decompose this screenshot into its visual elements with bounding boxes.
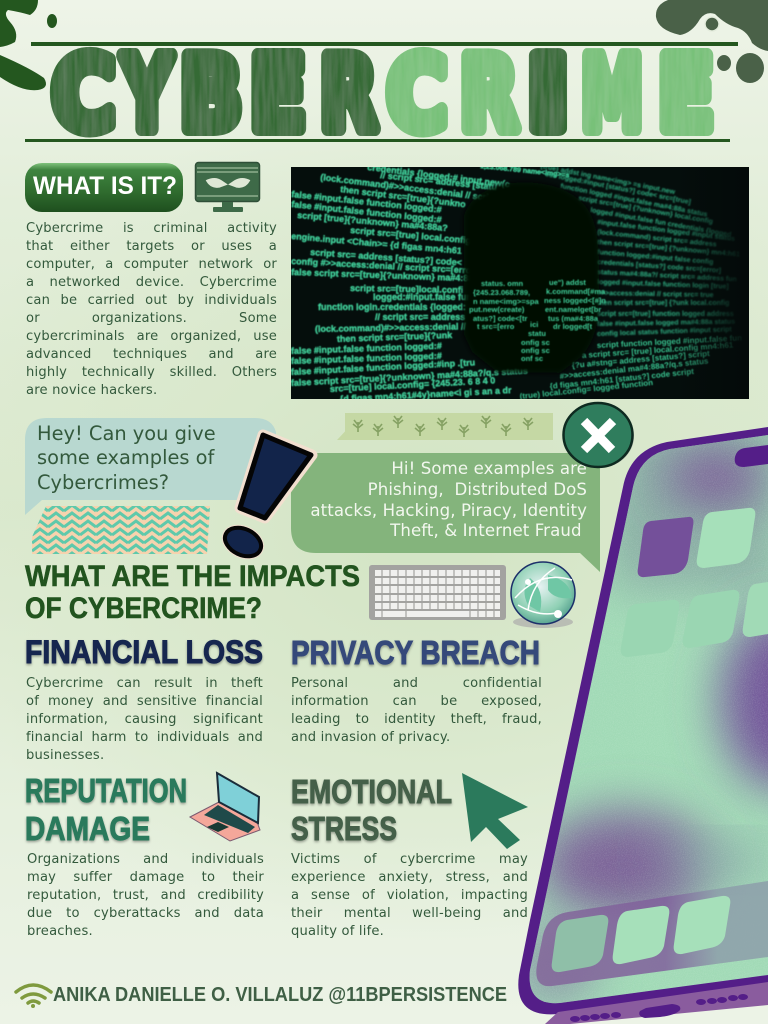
photo: code skull on dark screen: then script src=[true]{?unk xyxy=(337,330,453,344)
text: reputation damage: due to cyberattacks and data xyxy=(27,906,264,921)
text: reputation damage: Organizations and individuals xyxy=(27,852,264,866)
answer text: attacks, Hacking, Piracy, Identity xyxy=(310,501,587,520)
photo: code skull on dark screen: false #input.false function logged:# xyxy=(291,189,442,215)
text: privacy breach: Personal and confidential xyxy=(291,676,542,690)
photo: code skull on dark screen: statu xyxy=(528,329,546,338)
photo: code skull on dark screen: ess logged:#input [status?] code< src=[true] xyxy=(545,171,691,206)
intro paragraph: Cybercrime is criminal activity xyxy=(26,220,277,236)
photo: code skull on dark screen: (true) local.config= logged function xyxy=(519,378,654,401)
photo: code skull on dark screen: script src=[true]local.confi xyxy=(350,283,463,295)
text: financial loss: businesses. xyxy=(26,748,104,763)
photo: code skull on dark screen: then script src=[true]{?unkno xyxy=(340,184,467,209)
photo: code skull on dark screen: #>>access:denial // script src= true xyxy=(597,290,714,299)
photo: code skull on dark screen: script src=[true] local.config xyxy=(350,225,472,246)
what is it heading: WHAT IS IT? xyxy=(33,172,177,200)
text: financial loss: Cybercrime can result in theft xyxy=(26,676,263,690)
heading: impacts: WHAT ARE THE IMPACTS xyxy=(25,560,360,593)
title: M xyxy=(581,36,643,152)
photo: code skull on dark screen: credentials [status?] code src=[error] xyxy=(597,259,721,275)
question text: Cybercrimes? xyxy=(37,471,169,494)
photo: code skull on dark screen: script function logged #input.false fun xyxy=(597,333,742,350)
text: financial loss: information, causing significant xyxy=(26,712,263,727)
title: Y xyxy=(121,36,173,152)
photo: code skull on dark screen: false #input.false logged ma#4:88a status xyxy=(597,319,735,328)
photo: code skull on dark screen: false #input.false function logged:# xyxy=(291,199,442,225)
photo: code skull on dark screen: false #input.false function logged:#inp .[tru xyxy=(291,357,475,377)
photo: code skull on dark screen: dr logged[t xyxy=(553,322,593,331)
text: privacy breach: and invasion of privacy. xyxy=(291,730,450,745)
dock xyxy=(536,881,768,986)
photo: code skull on dark screen: credentials {logged:# input.new(c xyxy=(367,162,510,189)
photo: code skull on dark screen: ness logged<[#]n xyxy=(544,296,606,305)
phone illustration xyxy=(518,427,768,1024)
photo: code skull on dark screen: false #input.false function logged:# xyxy=(291,351,442,366)
photo: code skull on dark screen: (lock.command)#>>access:denial // xyxy=(315,321,467,334)
photo: code skull on dark screen: function logged #input.false ma#4:88a status xyxy=(560,183,708,219)
photo: code skull on dark screen: put.new(create) xyxy=(469,305,525,314)
intro paragraph: can be carried out by individuals xyxy=(26,293,277,308)
intro paragraph: cybercriminals are organized, use xyxy=(26,329,277,344)
intro paragraph: a networked device. Cybercrime xyxy=(26,275,277,290)
answer text xyxy=(310,459,587,540)
photo: code skull on dark screen: 1,23.068.789 name<img>=s xyxy=(480,163,570,179)
text: reputation damage: breaches. xyxy=(27,924,93,939)
text: privacy breach: leading to identity theft, fraud, xyxy=(291,712,542,727)
answer text: Phishing, Distributed DoS xyxy=(368,480,587,499)
photo: code skull on dark screen: status ma#4:88a?/ script src= address fun xyxy=(597,269,737,283)
heading: privacy breach: PRIVACY BREACH xyxy=(291,634,540,671)
right edge fade xyxy=(675,198,742,376)
intro paragraph xyxy=(26,220,277,398)
photo: code skull on dark screen: logged:#input.false fun xyxy=(373,292,472,302)
heading: financial loss: FINANCIAL LOSS xyxy=(25,634,263,670)
photo: code skull on dark screen: {245.23.068.789, xyxy=(473,288,530,297)
photo: code skull on dark screen: {d figas mn4:h61 [status?] code script xyxy=(549,367,695,391)
title: C xyxy=(52,36,115,152)
photo: code skull on dark screen: script src= address [status?] code< xyxy=(310,247,462,268)
question text: Hey! Can you give xyxy=(37,422,216,445)
heading: reputation damage: REPUTATION xyxy=(25,772,187,809)
intro paragraph: advanced techniques and are xyxy=(26,347,277,362)
intro paragraph: are novice hackers. xyxy=(26,383,157,398)
footer credit: ANIKA DANIELLE O. VILLALUZ @11BPERSISTENCE xyxy=(53,984,507,1006)
photo: code skull on dark screen: function logged:#input false config xyxy=(597,249,714,266)
photo: code skull on dark screen: function login.credentials {logged: xyxy=(318,302,466,312)
photo: code skull on dark screen: false script src=[true]{?unknown} ma#4:88a?/q.s status xyxy=(291,366,528,388)
text: emotional stress: Victims of cybercrime may xyxy=(291,852,528,866)
intro paragraph: that either targets or uses a xyxy=(26,239,277,254)
text: emotional stress: experience anxiety, stress, and xyxy=(291,870,528,885)
photo: code skull on dark screen: ici xyxy=(530,320,538,329)
text: privacy breach: information can be exposed, xyxy=(291,694,542,709)
text: emotional stress xyxy=(291,852,528,939)
photo: code skull on dark screen: k.command[#ma xyxy=(546,287,606,296)
photo: code skull on dark screen: // script src= address xyxy=(375,312,465,322)
photo: code skull on dark screen: engine.input <Chain>= {d figas mn4:h61 xyxy=(291,231,462,256)
speaker pill xyxy=(735,445,768,467)
title: E xyxy=(658,36,714,152)
photo: code skull on dark screen: atus?] code<[tr xyxy=(473,314,527,323)
text: reputation damage: may suffer damage to their xyxy=(27,870,264,885)
heading: impacts: OF CYBERCRIME? xyxy=(25,592,262,625)
photo: code skull on dark screen: script [true]{?unknown} ma#4:88a? xyxy=(297,210,448,233)
text: emotional stress: a sense of violation, impacting xyxy=(291,888,528,903)
text: financial loss: of money and sensitive financial xyxy=(26,694,263,709)
photo: code skull on dark screen: config local status function #input script xyxy=(597,326,733,338)
heading: reputation damage: DAMAGE xyxy=(25,810,150,847)
intro paragraph: computer, a computer network or xyxy=(26,257,277,272)
text: emotional stress: their mental well-being and xyxy=(291,906,528,921)
title: R xyxy=(320,36,377,152)
photo: code skull on dark screen: {?u a#stng= address [status?] script xyxy=(571,349,710,370)
photo: code skull on dark screen: status. omn xyxy=(481,279,524,288)
photo: code skull on dark screen: onfig sc xyxy=(521,338,550,347)
photo: code skull on dark screen: logged #input.false function login [true] xyxy=(597,279,729,291)
photo: code skull on dark screen: tus (ma#4:88a xyxy=(548,314,599,323)
text: reputation damage xyxy=(27,852,264,939)
title: B xyxy=(180,36,242,152)
question text xyxy=(37,422,216,494)
text: financial loss xyxy=(26,676,263,763)
photo: code skull on dark screen: false #input.false function logged:# xyxy=(291,341,442,356)
photo: code skull on dark screen: #>>access:denial ma#4:88a?/q.s status xyxy=(559,356,709,381)
answer text: Theft, & Internet Fraud xyxy=(390,521,582,540)
photo: code skull on dark screen: src=[true] local.config= {245.23. 6 8 4 0 xyxy=(330,375,495,394)
intro paragraph: highly technically skilled. Others xyxy=(26,365,277,380)
photo: code skull on dark screen: n name<img>=spa xyxy=(473,297,539,306)
heading: emotional stress: EMOTIONAL xyxy=(291,773,452,810)
text: emotional stress: quality of life. xyxy=(291,924,384,939)
photo: code skull on dark screen: onf sc xyxy=(521,354,543,363)
photo: code skull on dark screen: (lock.command)#>>access:denial // scri xyxy=(320,172,489,203)
photo: code skull on dark screen: then script src=[true] {?unknown} mn4:h61 xyxy=(597,239,740,258)
photo: code skull on dark screen: script src=[true] {?unknown} local.config xyxy=(578,195,714,226)
photo: code skull on dark screen: script src=[true] function logged address xyxy=(597,311,734,318)
photo: code skull on dark screen: onfig sc xyxy=(521,346,550,355)
photo: code skull on dark screen: (lock.command) script src= address xyxy=(597,229,717,249)
photo: code skull on dark screen: t src=[erro xyxy=(477,322,515,331)
photo: code skull on dark screen: // script src= address [statu xyxy=(380,170,498,192)
app icons xyxy=(552,508,768,1022)
text: reputation damage: reputation, trust, and credibility xyxy=(27,888,264,903)
photo: code skull on dark screen: ent.namelget[br xyxy=(545,305,601,314)
photo: code skull on dark screen: a script src= [true] local.config mn4:h61 xyxy=(582,340,734,360)
title: R xyxy=(460,36,518,152)
intro paragraph: or organizations. Some xyxy=(26,311,277,326)
skull silhouette xyxy=(464,182,599,373)
title: C xyxy=(387,36,447,152)
photo: code skull on dark screen: {true} addst ing name<img> =s input.new xyxy=(540,163,676,196)
photo: code skull on dark screen: then script src=[true] {?unk local.config xyxy=(597,300,729,307)
answer text: Hi! Some examples are xyxy=(391,459,587,478)
photo: code skull on dark screen: logged #input.false fun credentials {logged xyxy=(590,207,732,239)
text: financial loss: financial harm to individuals and xyxy=(26,730,263,745)
text: privacy breach xyxy=(291,676,542,745)
photo: code skull on dark screen: #input.false function logged #input status xyxy=(597,219,736,243)
photo: code skull on dark screen xyxy=(291,167,749,399)
photo: code skull on dark screen: ue") addst xyxy=(549,278,586,287)
heading: emotional stress: STRESS xyxy=(291,810,397,847)
title: E xyxy=(250,36,306,152)
title: I xyxy=(527,36,569,152)
photo: code skull on dark screen: false script src=[true]{?unknown} ma#4:88a?/ xyxy=(291,267,487,284)
photo: code skull on dark screen: config #>>access:denial // script src=[error] xyxy=(291,256,478,276)
photo: code skull on dark screen: {d figas mn4:h61#4y}name<i gi s an a dr xyxy=(340,385,512,404)
question text: some examples of xyxy=(37,446,214,469)
